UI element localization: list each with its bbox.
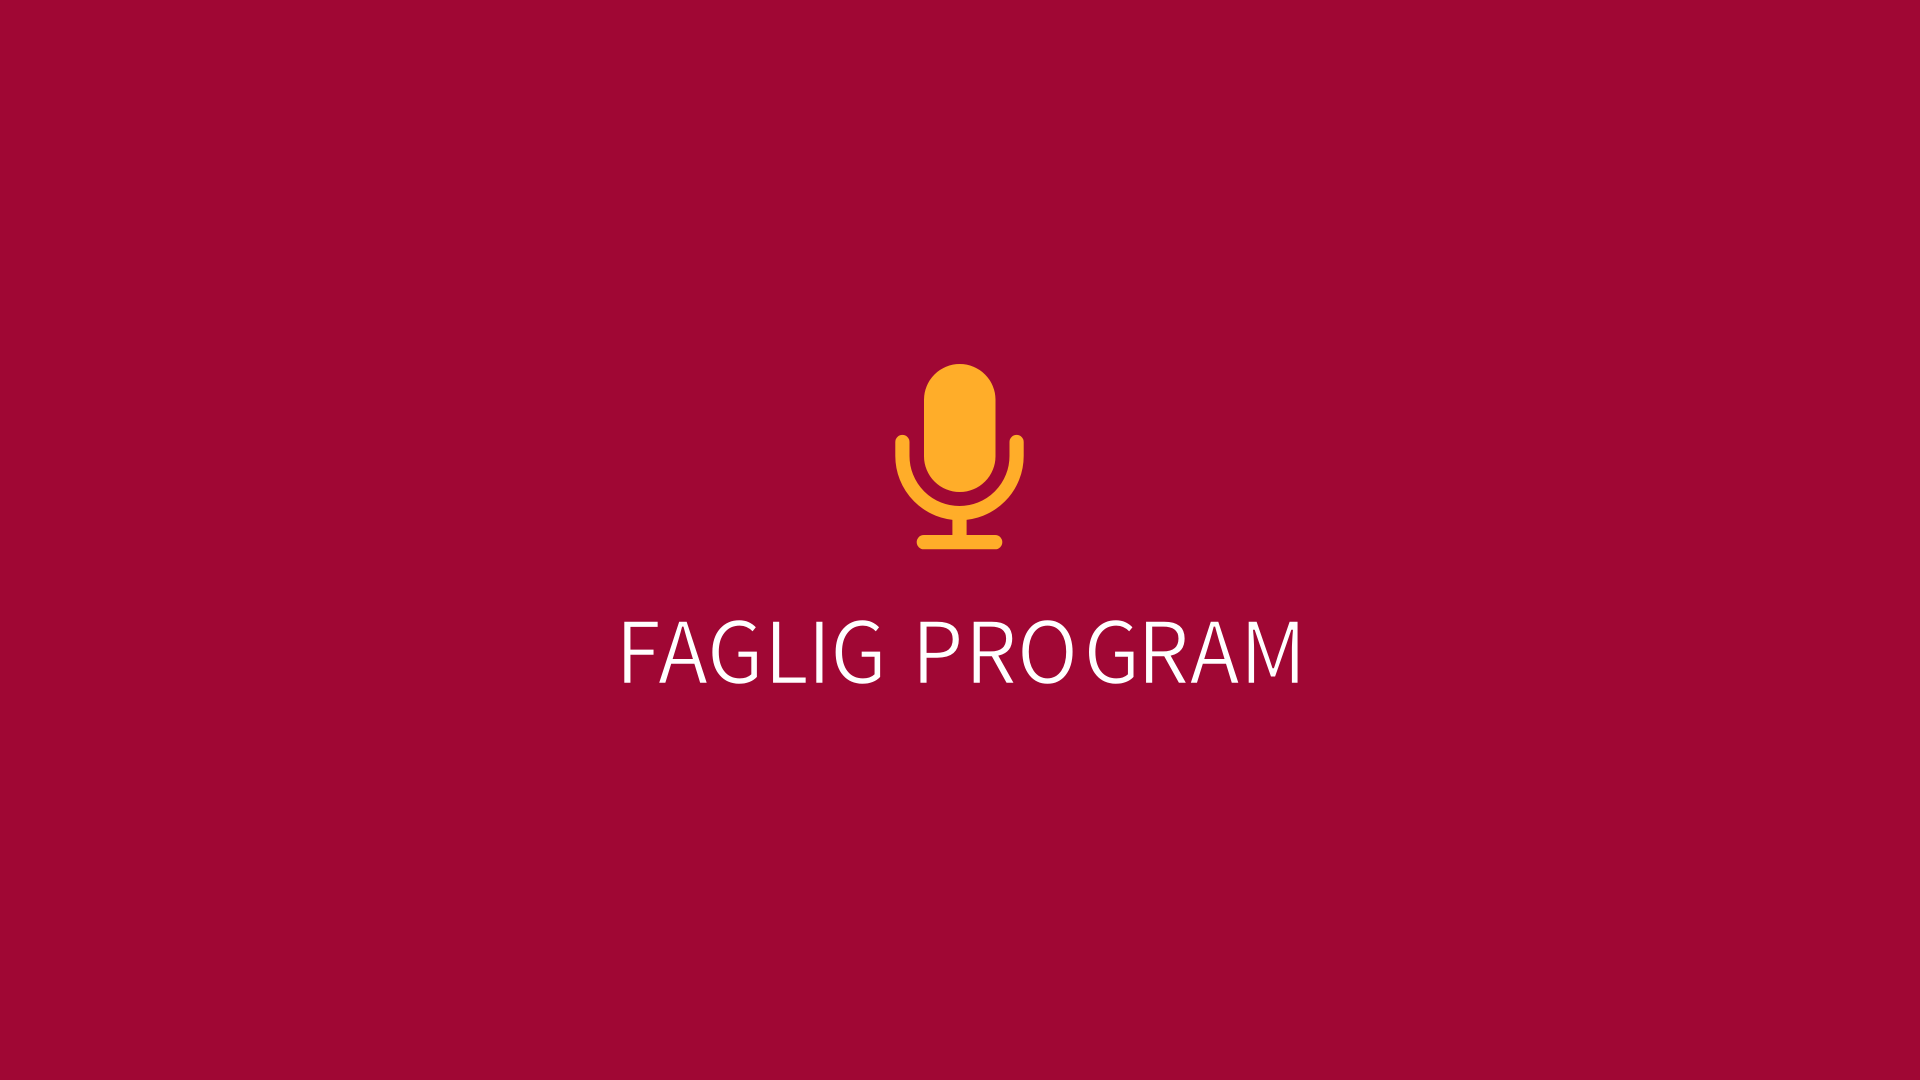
icon: microphone bbox=[902, 364, 1017, 549]
title text: FAGLIG PROGRAM bbox=[615, 586, 1307, 709]
